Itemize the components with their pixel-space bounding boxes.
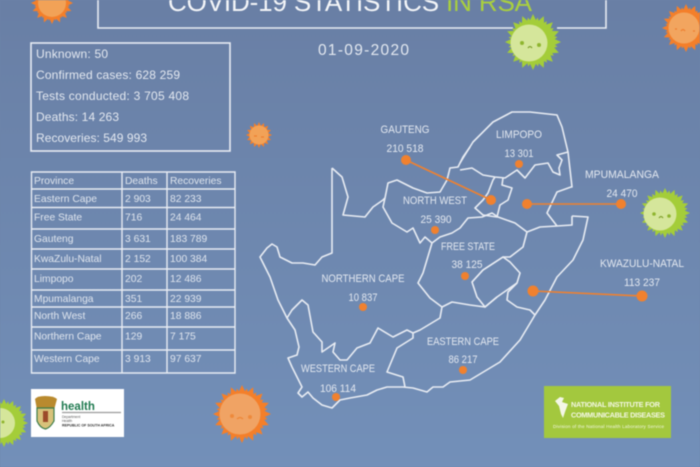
table text: 129 bbox=[125, 332, 142, 342]
stat: recoveries: Recoveries: 549 993 bbox=[36, 131, 147, 145]
logo small text bbox=[62, 415, 115, 428]
logo wordmark: health bbox=[61, 401, 95, 413]
table text: 183 789 bbox=[170, 234, 207, 245]
virus: bottom orange bbox=[212, 384, 272, 444]
title box bbox=[98, 0, 606, 28]
table text: 266 bbox=[125, 311, 142, 322]
table text: 97 637 bbox=[170, 354, 202, 365]
label: Eastern Cape bbox=[427, 336, 499, 366]
icon: Africa mark bbox=[555, 397, 568, 418]
virus: top left orange bbox=[31, 0, 73, 24]
label: Northern Cape: NORTHERN CAPE bbox=[322, 273, 404, 285]
NICD name: NATIONAL INSTITUTE FOR bbox=[571, 400, 661, 409]
map: Free State and KZN border bbox=[472, 232, 527, 282]
label: Western Cape: 106 114 bbox=[320, 383, 356, 395]
icon: coat of arms bbox=[35, 396, 57, 429]
label: Eastern Cape: 86 217 bbox=[448, 354, 478, 366]
date: 01-09-2020 bbox=[318, 42, 409, 59]
label: Mpumalanga bbox=[585, 169, 660, 200]
map: Free State and Northern Cape border bbox=[418, 243, 497, 307]
table text: 351 bbox=[125, 294, 142, 305]
map: Eastern Cape and Western Cape border bbox=[387, 307, 442, 387]
map: Eastern Cape and KZN border bbox=[507, 283, 535, 315]
label: KwaZulu-Natal: KWAZULU-NATAL bbox=[600, 258, 684, 270]
table text bbox=[34, 176, 222, 365]
virus: top green bbox=[504, 13, 562, 71]
table text: 24 464 bbox=[170, 212, 202, 224]
table text: 716 bbox=[125, 212, 142, 224]
table text: KwaZulu-Natal bbox=[34, 254, 102, 265]
table text: 22 939 bbox=[170, 294, 202, 305]
label: Gauteng bbox=[380, 124, 430, 155]
label: Limpopo bbox=[496, 129, 542, 160]
label: Mpumalanga: MPUMALANGA bbox=[585, 169, 660, 181]
logo small text: Department bbox=[62, 415, 80, 419]
table text: 7 175 bbox=[170, 332, 196, 342]
province table bbox=[31, 172, 235, 373]
label: Northern Cape bbox=[322, 273, 404, 304]
stat: tests: Tests conducted: 3 705 408 bbox=[36, 89, 189, 103]
map of South Africa bbox=[260, 112, 588, 408]
virus: right green bbox=[638, 186, 692, 240]
connector: Mpumalanga bbox=[522, 199, 626, 209]
table text: 3 913 bbox=[125, 354, 151, 365]
table text: 18 886 bbox=[170, 311, 202, 322]
logo small text: REPUBLIC OF SOUTH AFRICA bbox=[62, 424, 115, 428]
map connectors and dots bbox=[332, 155, 648, 401]
table text: 202 bbox=[125, 274, 142, 285]
map: North West south edge bbox=[383, 198, 527, 243]
NICD name bbox=[571, 400, 665, 420]
label: Mpumalanga: 24 470 bbox=[606, 188, 638, 200]
connector: Gauteng bbox=[401, 155, 496, 205]
label: Free State bbox=[441, 241, 495, 271]
stats panel bbox=[31, 43, 230, 151]
table text: Northern Cape bbox=[34, 332, 102, 342]
table text: Limpopo bbox=[34, 274, 74, 285]
map: outer border west and south bbox=[260, 168, 588, 408]
logo: health department bbox=[31, 389, 124, 437]
table text: 100 384 bbox=[170, 254, 207, 265]
map: Limpopo bbox=[460, 112, 568, 178]
stat: unknown: Unknown: 50 bbox=[36, 47, 108, 61]
label: Limpopo: LIMPOPO bbox=[496, 129, 542, 141]
table text: 82 233 bbox=[170, 194, 202, 205]
NICD name: COMMUNICABLE DISEASES bbox=[571, 410, 665, 420]
map: Gauteng bbox=[475, 177, 512, 217]
table text: North West bbox=[34, 311, 85, 322]
table text: 2 903 bbox=[125, 194, 151, 205]
label: North West bbox=[403, 195, 467, 226]
label: North West: 25 390 bbox=[420, 214, 452, 226]
table text: Western Cape bbox=[34, 354, 100, 365]
table text: Gauteng bbox=[34, 234, 74, 245]
label: Western Cape bbox=[301, 363, 375, 395]
label: Limpopo: 13 301 bbox=[504, 148, 534, 160]
table text: Recoveries bbox=[170, 176, 222, 187]
connector: KwaZulu-Natal bbox=[528, 286, 648, 302]
table text: Province bbox=[34, 176, 74, 187]
virus: top right orange bbox=[661, 3, 700, 53]
label: Free State: FREE STATE bbox=[441, 241, 495, 253]
table text: Deaths bbox=[125, 176, 158, 187]
dots: other provinces bbox=[332, 160, 523, 401]
label: Gauteng: 210 518 bbox=[386, 143, 424, 155]
label: Western Cape: WESTERN CAPE bbox=[301, 363, 375, 375]
label: Free State: 38 125 bbox=[452, 259, 482, 271]
table text: Eastern Cape bbox=[34, 194, 97, 205]
logo: NICD bbox=[544, 386, 671, 438]
map: Mpumalanga east and Swaziland bbox=[527, 152, 572, 232]
label: KwaZulu-Natal: 113 237 bbox=[624, 277, 660, 289]
label: North West: NORTH WEST bbox=[403, 195, 467, 207]
label: Eastern Cape: EASTERN CAPE bbox=[427, 336, 499, 348]
stat: deaths: Deaths: 14 263 bbox=[36, 110, 119, 124]
logo small text: Health bbox=[62, 419, 72, 423]
virus: left green bbox=[0, 397, 30, 449]
map: Lesotho bbox=[472, 257, 520, 307]
table text: Mpumalanga bbox=[34, 294, 94, 305]
map: Western Cape and Northern Cape border bbox=[287, 300, 413, 360]
virus: small orange bbox=[246, 122, 272, 148]
map: Northern Cape north edge and North West bbox=[332, 147, 470, 217]
table text: 12 486 bbox=[170, 274, 202, 285]
label: KwaZulu-Natal bbox=[600, 258, 684, 289]
stat: confirmed: Confirmed cases: 628 259 bbox=[36, 68, 180, 82]
NICD tagline: Division of the National Health Laboratory Service bbox=[553, 424, 664, 429]
table text: Free State bbox=[34, 212, 82, 224]
table text: 3 631 bbox=[125, 234, 151, 245]
label: Northern Cape: 10 837 bbox=[348, 292, 378, 304]
table text: 2 152 bbox=[125, 254, 151, 265]
label: Gauteng: GAUTENG bbox=[380, 124, 430, 136]
